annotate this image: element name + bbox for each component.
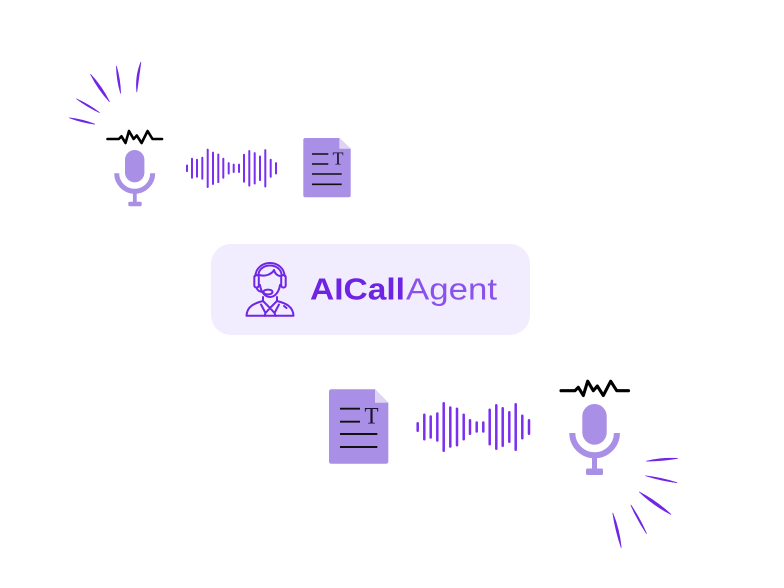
icon: sound rays bottom right [613,458,678,548]
icon: sound wave bottom [418,403,529,451]
icon: support agent with headset [246,263,294,316]
icon: text document top: T [332,148,344,168]
icon: text document bottom [329,389,388,464]
brand wordmark: AICall [310,272,405,306]
icon: sound rays top left [70,62,141,124]
icon: text document top [303,138,351,197]
icon: pulse line top [108,131,162,143]
icon: sound wave top [187,150,276,187]
output group: text to voice [329,381,678,548]
panel: AI Call Agent badge [211,244,530,335]
brand wordmark light part: Agent [406,272,497,306]
badge background [211,244,530,335]
icon: pulse line bottom [561,381,628,396]
icon: microphone bottom [572,404,617,475]
icon: text document bottom: T [364,404,379,428]
icon: microphone top [117,150,153,206]
input group: voice to text [70,62,351,206]
